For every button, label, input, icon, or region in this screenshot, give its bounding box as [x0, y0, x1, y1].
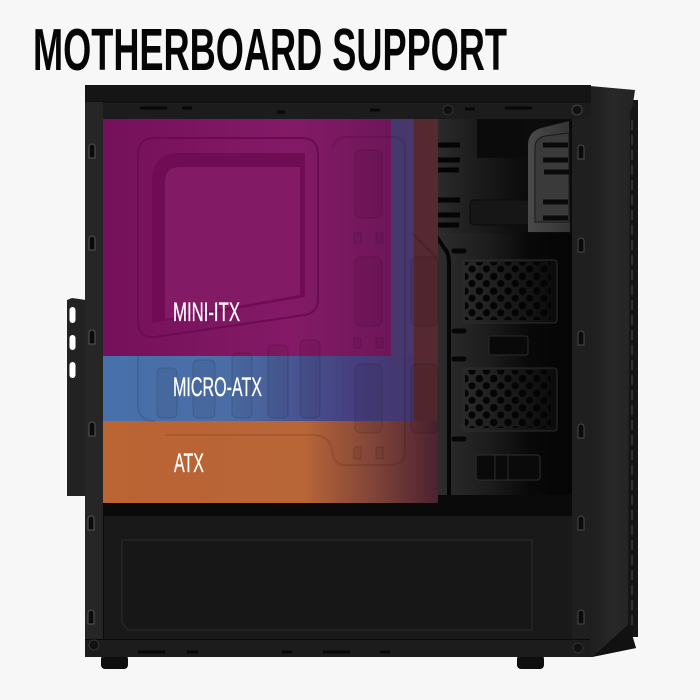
icon: perforated vent lower	[462, 368, 557, 431]
motherboard size overlays	[103, 119, 438, 503]
right rail	[572, 119, 590, 657]
left rail	[85, 102, 103, 657]
icon: perforated vent upper	[462, 260, 557, 323]
panel: Micro-ATX area	[103, 119, 414, 421]
plate latches	[454, 251, 540, 480]
bottom rail	[85, 639, 590, 657]
label: ATX: ATX	[174, 448, 204, 478]
upper drive bracket	[528, 121, 570, 232]
panel: ATX area	[103, 119, 438, 503]
case body	[85, 85, 591, 657]
front panel	[590, 86, 638, 657]
embossed case tray details	[138, 137, 437, 465]
label: MICRO-ATX: MICRO-ATX	[173, 372, 262, 402]
interior upper bay	[438, 119, 572, 234]
icon: case feet	[101, 655, 544, 669]
computer case	[67, 85, 638, 669]
lower drive plate	[434, 233, 572, 504]
icon: rear expansion bracket	[67, 298, 86, 496]
top rail	[85, 85, 591, 119]
label: MINI-ITX: MINI-ITX	[173, 297, 240, 327]
lower shroud	[103, 503, 572, 640]
tray slots	[157, 150, 438, 459]
panel: Mini-ITX area	[103, 119, 391, 356]
